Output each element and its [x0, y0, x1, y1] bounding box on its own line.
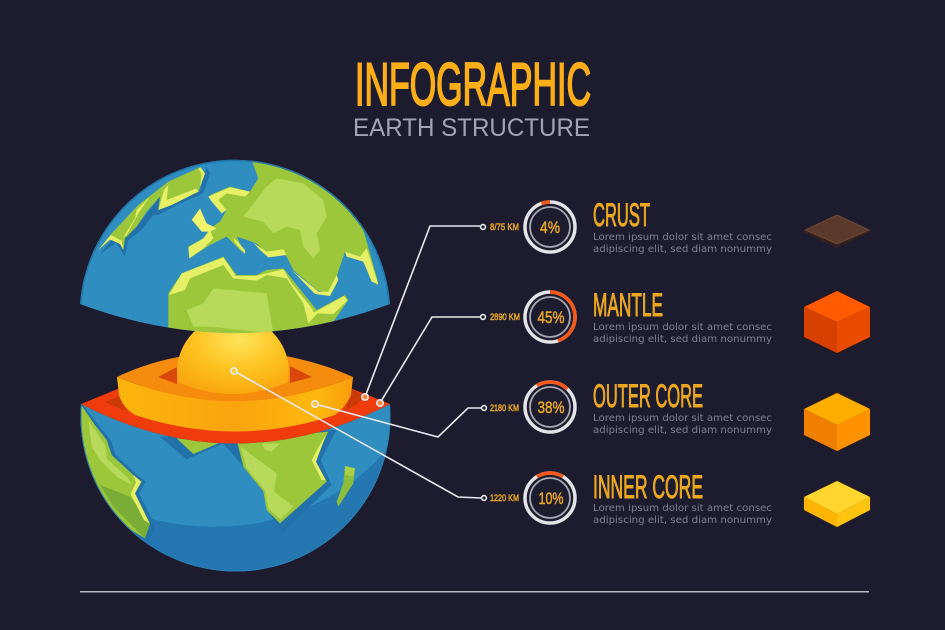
- icon: crust slab: [804, 215, 870, 248]
- outer core ring: [117, 355, 353, 432]
- gauge 4%: 4%: [540, 218, 560, 237]
- distance label: 2890 KM: [490, 312, 520, 323]
- description: adipiscing elit, sed diam nonummy: [593, 515, 772, 526]
- africa land: [168, 257, 348, 337]
- row: outer core: [490, 378, 871, 452]
- bottom divider line: [80, 591, 869, 592]
- land shadows: [80, 405, 336, 522]
- gauge 38%: [525, 382, 575, 432]
- distance label: 8/75 KM: [490, 222, 519, 233]
- crust slab: [81, 386, 390, 444]
- distance label: 1220 KM: [490, 493, 519, 504]
- land shadows: [100, 167, 210, 257]
- icon: inner core slab: [803, 480, 871, 528]
- gauge 10%: 10%: [538, 489, 564, 508]
- gauge 45%: [525, 292, 575, 342]
- description: Lorem ipsum dolor sit amet consec: [593, 503, 772, 514]
- hemisphere rim: [80, 160, 390, 304]
- description: adipiscing elit, sed diam nonummy: [593, 425, 772, 436]
- row: mantle: [490, 287, 871, 354]
- heading: INNER CORE: [593, 469, 703, 505]
- description: adipiscing elit, sed diam nonummy: [593, 244, 772, 255]
- lower shading: [90, 452, 385, 572]
- hemisphere rim: [80, 404, 390, 571]
- connector: inner core: [231, 368, 486, 500]
- heading: MANTLE: [593, 287, 663, 323]
- heading: OUTER CORE: [593, 378, 703, 414]
- description: [593, 322, 772, 345]
- connector: crust: [362, 225, 485, 400]
- upper hemisphere: [80, 160, 390, 333]
- lower hemisphere: [80, 404, 390, 572]
- eurasia land: [188, 160, 378, 292]
- description: [593, 232, 772, 255]
- infographic canvas: [80, 62, 871, 592]
- gauge 45%: 45%: [538, 308, 564, 327]
- gauge 38%: 38%: [538, 398, 564, 417]
- description: Lorem ipsum dolor sit amet consec: [593, 413, 772, 424]
- distance label: 2180 KM: [490, 403, 519, 414]
- south america land: [80, 404, 150, 538]
- title: INFOGRAPHIC: [355, 51, 591, 118]
- gauge 4%: [525, 202, 575, 252]
- britain: [192, 208, 217, 232]
- description: [593, 413, 772, 436]
- row: inner core: [490, 469, 871, 528]
- row: crust: [490, 197, 870, 255]
- heading: CRUST: [593, 197, 650, 233]
- subtitle: EARTH STRUCTURE: [353, 114, 590, 142]
- description: Lorem ipsum dolor sit amet consec: [593, 322, 772, 333]
- description: Lorem ipsum dolor sit amet consec: [593, 232, 772, 243]
- greenland land: [98, 167, 205, 250]
- gauge 10%: [525, 473, 575, 523]
- connector: outer core: [312, 401, 486, 437]
- description: [593, 503, 772, 526]
- inner core sphere: [177, 316, 289, 394]
- icon: mantle cube: [803, 289, 871, 354]
- connector: mantle: [377, 315, 485, 406]
- icon: outer core cube: [803, 391, 871, 452]
- description: adipiscing elit, sed diam nonummy: [593, 334, 772, 345]
- madagascar: [337, 466, 355, 507]
- africa land: [177, 432, 328, 523]
